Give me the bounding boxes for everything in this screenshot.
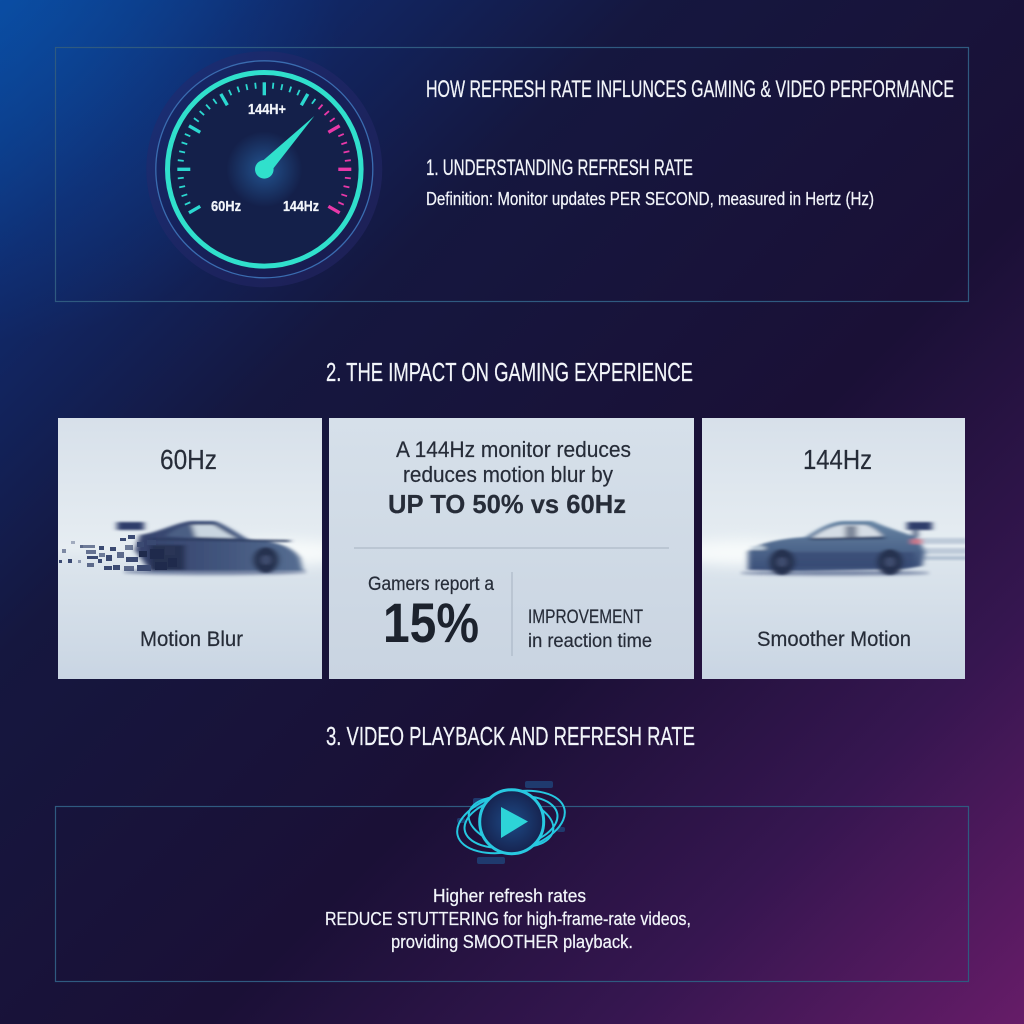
icon: play button with orbit rings bbox=[451, 781, 571, 864]
text: reaction time improvement bbox=[528, 607, 652, 652]
text: reaction time improvement: in reaction time bbox=[528, 631, 652, 652]
label: 60Hz: 60Hz bbox=[160, 444, 217, 475]
panel: 144Hz smoother motion card bbox=[702, 418, 965, 679]
icon: speedometer gauge bbox=[151, 56, 377, 282]
stat: 15 percent: Gamers report a bbox=[368, 574, 494, 595]
panel: statistics card bbox=[329, 418, 694, 679]
gauge needle bbox=[255, 116, 314, 179]
caption: smoother motion: Smoother Motion bbox=[757, 628, 911, 651]
text: video playback description: Higher refresh rates bbox=[433, 885, 586, 906]
panel: 60Hz motion blur card bbox=[58, 418, 350, 679]
text: video playback description: REDUCE STUTTERING for high-frame-rate videos, bbox=[325, 908, 691, 929]
definition text: Definition: Monitor updates PER SECOND, measured in Hertz (Hz) bbox=[426, 189, 874, 209]
gauge label: 144H+: 144H+ bbox=[248, 102, 286, 118]
caption: motion blur: Motion Blur bbox=[140, 628, 243, 651]
illustration: blurred disintegrating car bbox=[59, 521, 307, 575]
label: 144Hz: 144Hz bbox=[803, 444, 872, 475]
text: reaction time improvement: IMPROVEMENT bbox=[528, 607, 643, 628]
pixel fragments bbox=[59, 535, 177, 571]
stat: 15 percent: 15% bbox=[383, 591, 479, 654]
text: video playback description bbox=[325, 885, 691, 952]
heading: video playback and refresh rate: 3. VIDEO PLAYBACK AND REFRESH RATE bbox=[326, 721, 695, 751]
heading: understanding refresh rate: 1. UNDERSTANDING REFRESH RATE bbox=[426, 155, 693, 180]
text: video playback description: providing SMOOTHER playback. bbox=[391, 931, 633, 952]
text: blur reduction: A 144Hz monitor reduces bbox=[396, 437, 631, 462]
heading: impact on gaming experience: 2. THE IMPACT ON GAMING EXPERIENCE bbox=[326, 357, 693, 387]
text: blur reduction: reduces motion blur by bbox=[403, 462, 614, 487]
panel: understanding refresh rate bbox=[56, 48, 968, 302]
gauge label: 144Hz: 144Hz bbox=[283, 199, 319, 215]
stat: 15 percent bbox=[368, 574, 494, 654]
illustration: smooth moving car bbox=[740, 521, 972, 576]
panel: video playback bbox=[56, 781, 968, 982]
text: blur reduction bbox=[388, 437, 631, 519]
gauge ticks bbox=[177, 82, 351, 213]
gauge label: 60Hz: 60Hz bbox=[211, 199, 241, 215]
text: blur reduction: UP TO 50% vs 60Hz bbox=[388, 489, 626, 519]
